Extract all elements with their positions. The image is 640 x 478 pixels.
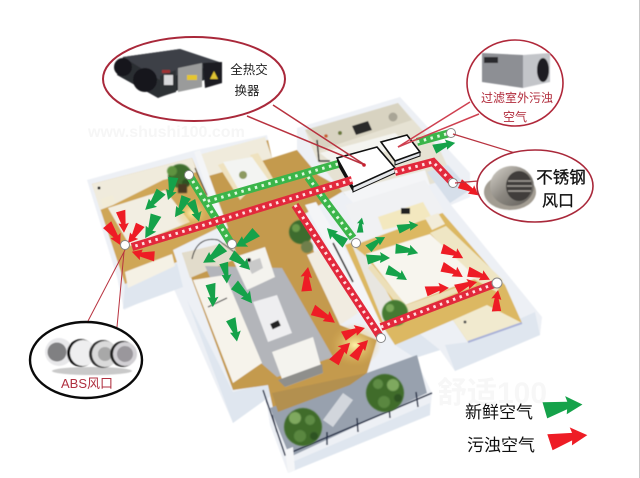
room: left bedroom: [92, 158, 220, 288]
duct: exhaust air (red): [132, 162, 497, 338]
legend label: fresh air: 新鲜空气: [465, 403, 533, 422]
callout ring: [477, 150, 593, 222]
label: filter function line 2: 空气: [503, 109, 527, 124]
legend label: polluted air: 污浊空气: [467, 436, 535, 455]
watermark: brand: 舒适100: [437, 377, 547, 410]
ceiling vents: [120, 128, 502, 342]
label: product name line 2: 换器: [234, 84, 260, 98]
label: vent word: 风口: [542, 193, 574, 210]
legend arrow: polluted air: [547, 425, 589, 451]
icon: steel vent: [484, 166, 536, 210]
leader lines: [398, 102, 479, 147]
master bedroom: [345, 180, 522, 345]
icon: exchanger unit: [114, 49, 222, 98]
leader lines: [247, 105, 365, 165]
label: vent material: 不锈钢: [536, 168, 586, 187]
green airflow arrows: [139, 137, 457, 343]
legend arrow: fresh air: [542, 395, 583, 419]
watermark: site address: www.shushi100.com: [87, 124, 245, 141]
label: filter function: 过滤室外污浊: [481, 90, 553, 105]
callout: heat exchanger: [103, 37, 366, 167]
outer walls: [87, 97, 542, 473]
kitchen: [305, 103, 470, 210]
icon: four round vents: [45, 338, 137, 375]
heat exchanger ceiling units: [337, 135, 420, 192]
callout: stainless steel vent: [453, 134, 593, 222]
leader lines: [453, 134, 515, 183]
floor plan: [87, 97, 542, 473]
label: ABS vent: ABS风口: [61, 376, 113, 391]
plants: [167, 164, 408, 446]
living room: [182, 202, 392, 387]
callout ring: [30, 322, 142, 398]
red airflow arrows: [102, 177, 504, 367]
callout ring: [103, 37, 285, 121]
callout: outdoor air filter: [398, 40, 563, 147]
wall outer faces: [123, 263, 540, 473]
icon: filter box: [482, 53, 550, 88]
room: central wood floor: [182, 140, 377, 408]
dining room: [194, 137, 275, 232]
callout ring: [467, 40, 563, 126]
duct: fresh air (green): [189, 133, 450, 245]
label: product name: 全热交: [230, 62, 268, 77]
callout: ABS vent: [30, 250, 142, 398]
balcony: [263, 355, 432, 473]
legend: [465, 395, 589, 455]
leader lines: [88, 250, 125, 327]
